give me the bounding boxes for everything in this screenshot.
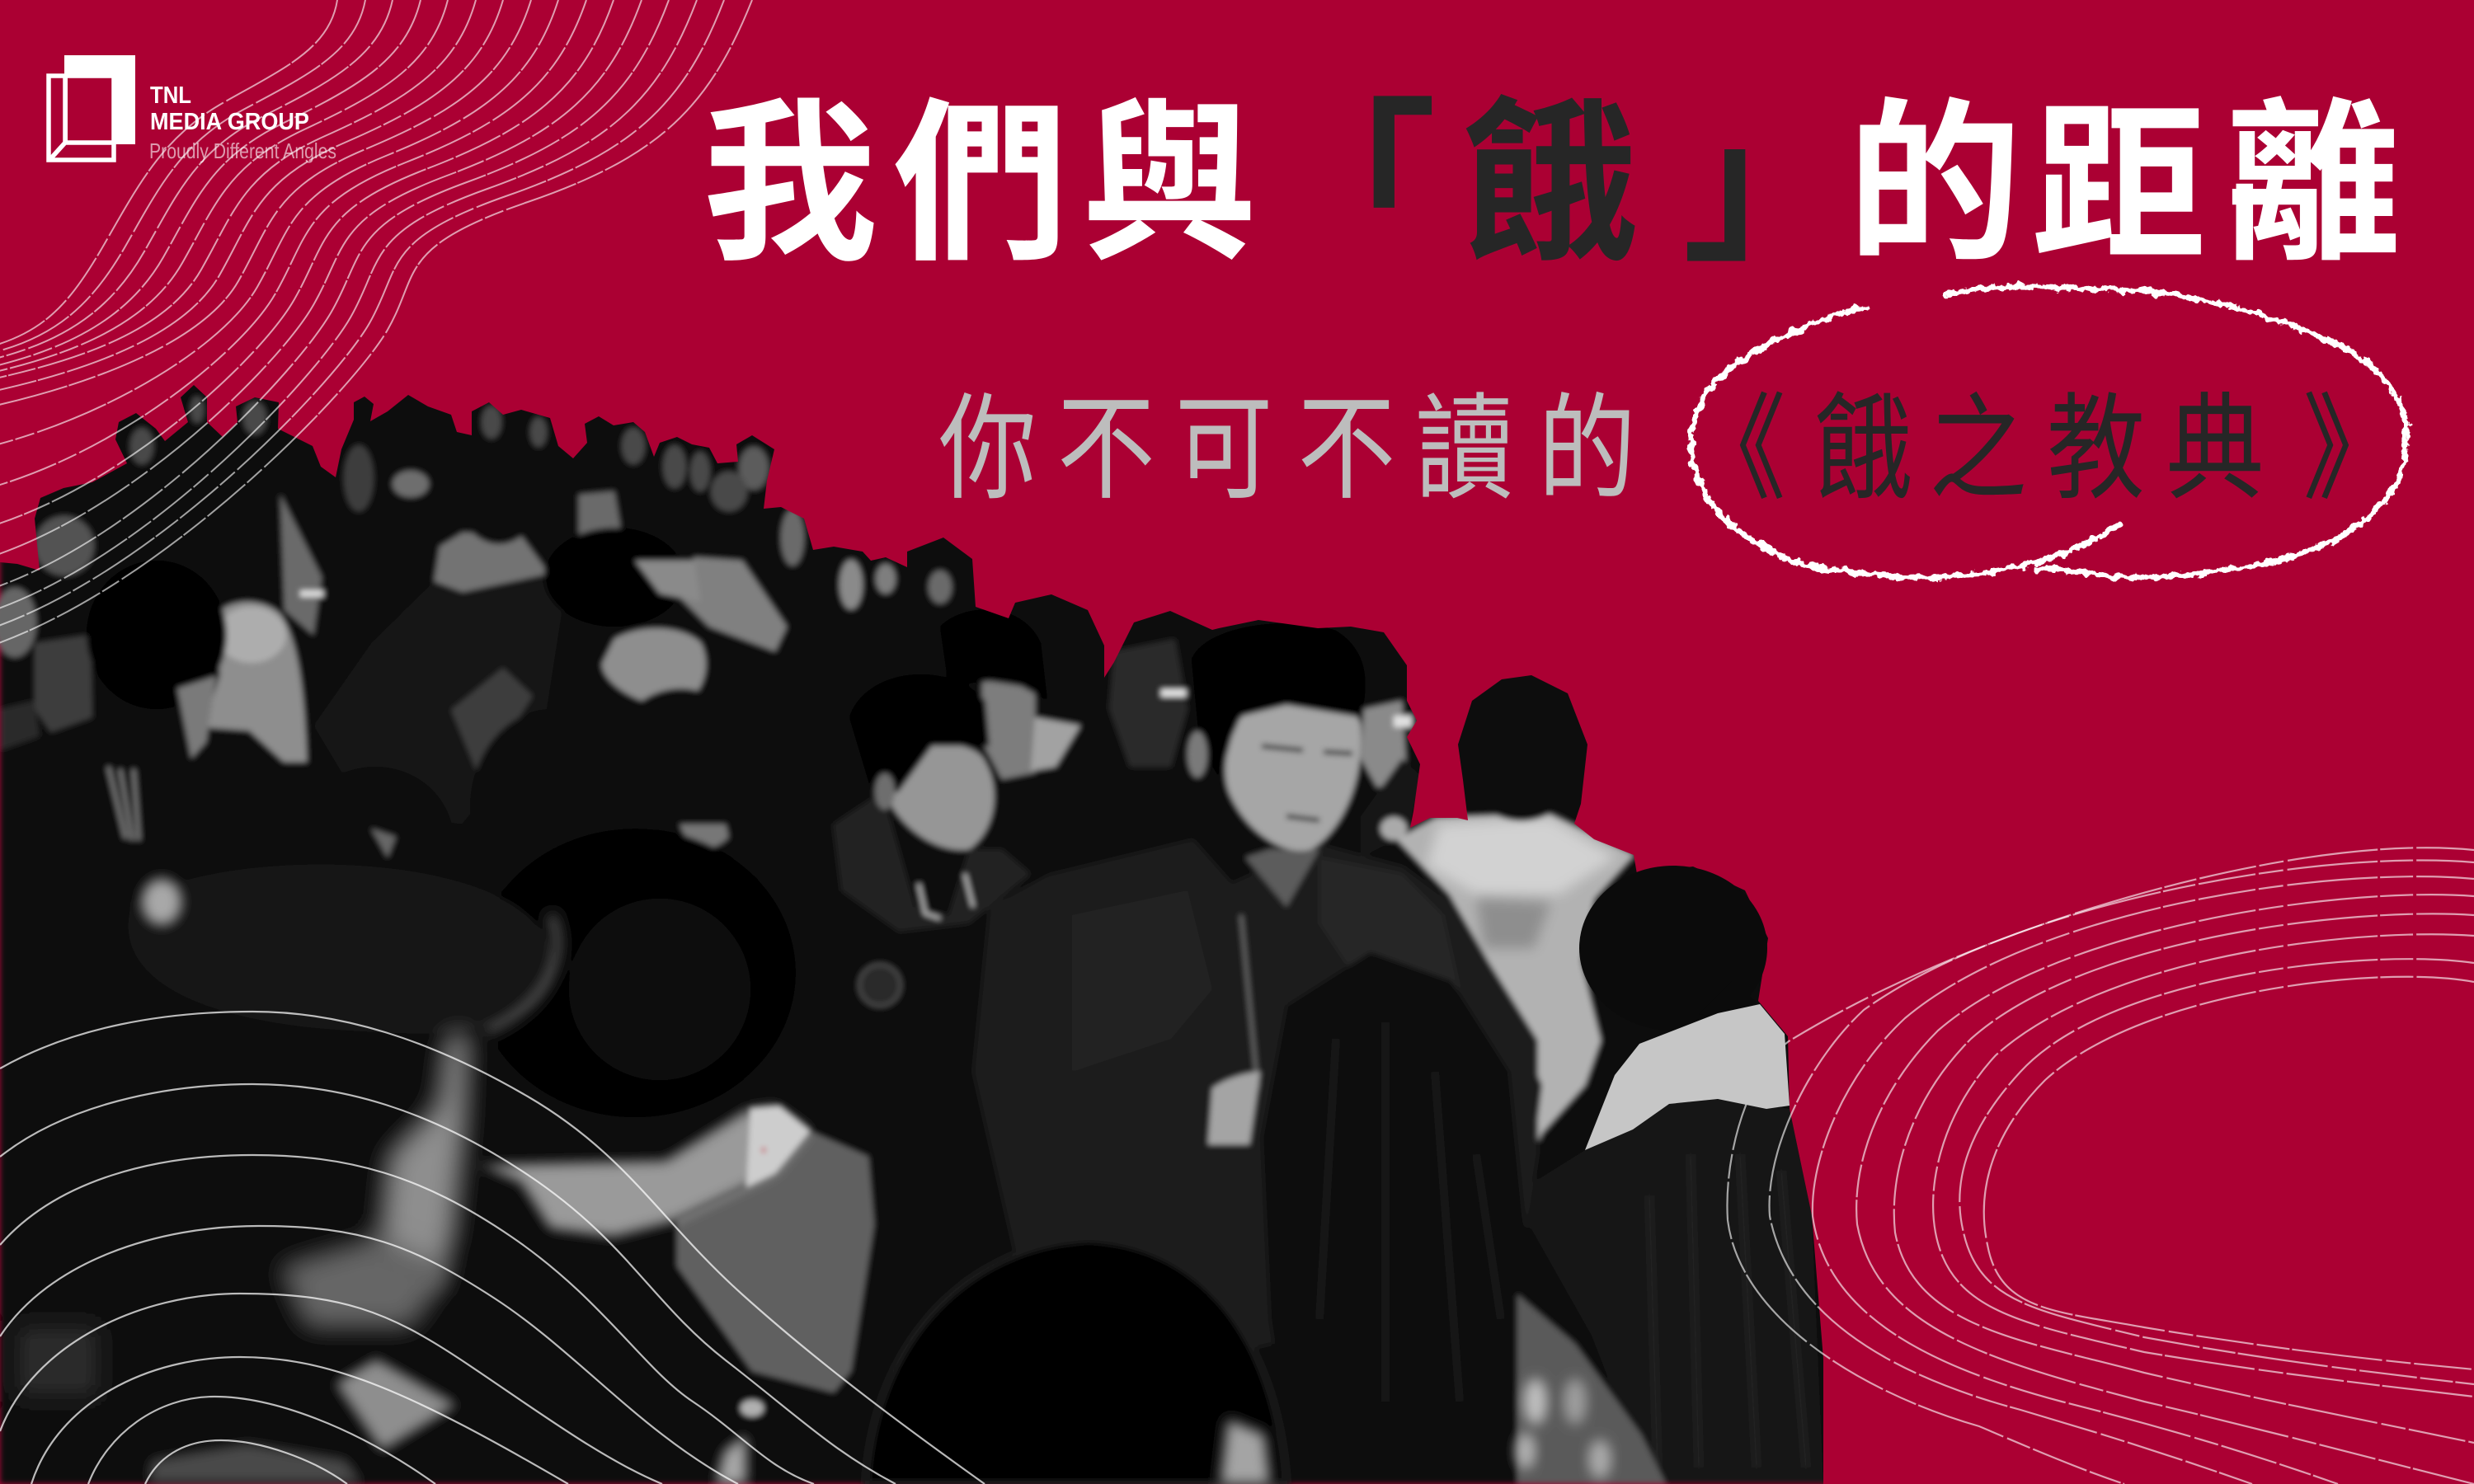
crowd: far row faces	[130, 397, 952, 609]
crowd: woman with glasses	[638, 685, 754, 876]
decorative wave lines: top left	[0, 0, 752, 646]
logo wordmark: TNL	[150, 82, 191, 109]
crowd: man behind older man	[1361, 701, 1420, 857]
crowd: patterned coat bottom	[1516, 1294, 1666, 1484]
logo icon	[49, 55, 135, 160]
crowd: foreground man with cap	[12, 864, 557, 1484]
crowd: older man hand	[1208, 1072, 1260, 1144]
crowd: hoodie man in far row	[313, 445, 622, 824]
crowd: young man	[742, 674, 1064, 1484]
crowd: left faces and patterned clothing	[0, 516, 94, 763]
subtitle: book title: 《餓之教典》	[1688, 384, 2401, 514]
title	[703, 87, 2401, 282]
crowd: jacket badge	[859, 965, 901, 1006]
crowd: hair heads lower left of centre	[341, 709, 632, 889]
decorative wave lines: bottom left	[0, 1012, 985, 1484]
crowd: foreground long hair	[1263, 952, 1532, 1478]
decorative wave lines: bottom right swirl	[1727, 848, 2474, 1484]
title: 的距離: 的距離	[1847, 87, 2401, 282]
subtitle: grey lead-in: 你不可不讀的	[938, 384, 1636, 514]
crowd: grey-haired man	[203, 495, 323, 762]
crowd: foreground long-haired person in grey coat	[474, 829, 874, 1484]
logo tagline: Proudly Different Angles	[149, 139, 336, 163]
crowd: woman with light hood	[1394, 808, 1634, 1145]
hand-drawn ellipse around book title	[1691, 286, 2406, 577]
crowd: dark haired man in front of grey-haired man	[0, 561, 227, 932]
title: 我們與: 我們與	[703, 87, 1257, 282]
crowd: coat of woman with scarf	[1512, 1099, 1823, 1484]
crowd: faces behind young man	[940, 606, 1188, 779]
crowd: young man mid-left and sleeve	[451, 528, 787, 779]
crowd: adidas stripes	[109, 768, 139, 838]
logo wordmark second line: MEDIA GROUP	[150, 109, 309, 135]
crowd: woman with scarf, in front of the swirl lines	[1579, 866, 1790, 1150]
crowd: older man in jacket	[973, 623, 1538, 1352]
crowd: foreground head at bottom	[866, 1239, 1286, 1484]
title: bracketed hunger word: 「餓」	[1262, 87, 1857, 282]
photo: crowd in black and white	[0, 385, 1823, 1484]
logo: TNL Media Group	[49, 55, 336, 163]
